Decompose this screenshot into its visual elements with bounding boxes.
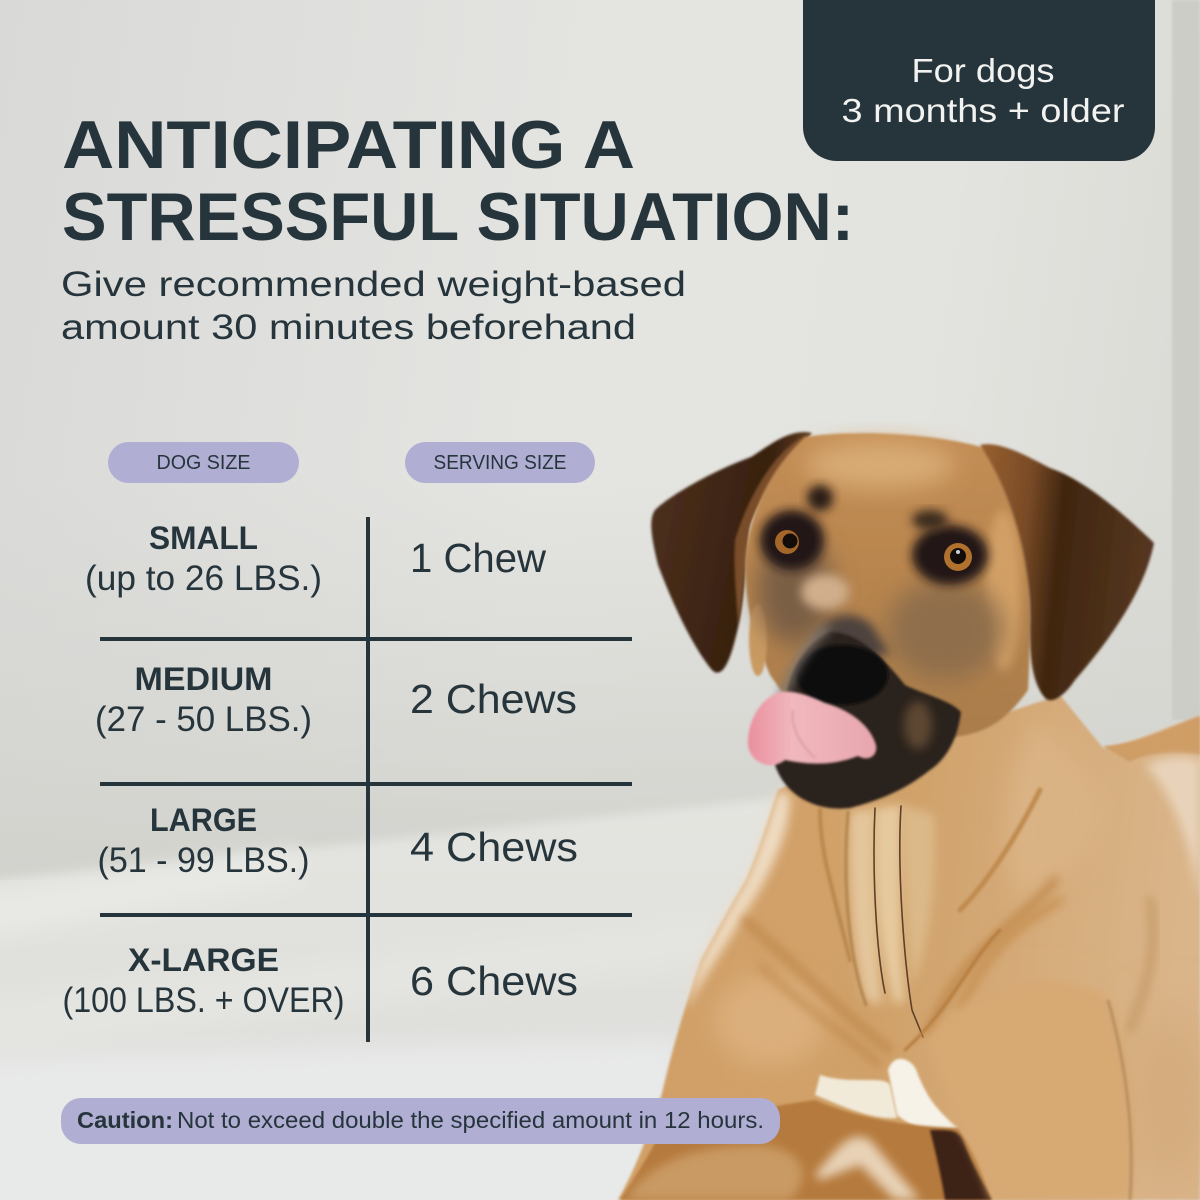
row: large: 4 Chews	[410, 824, 578, 870]
nose	[796, 645, 888, 705]
muzzle brown patch	[904, 701, 932, 749]
row: large	[98, 802, 578, 880]
dog eyes	[775, 530, 972, 571]
subtitle: Give recommended weight-based	[61, 264, 686, 304]
caution note	[61, 1098, 780, 1144]
title	[62, 107, 854, 255]
title: ANTICIPATING A	[62, 107, 635, 183]
caution note: Not to exceed double the specified amount in 12 hours.	[177, 1107, 764, 1133]
row: x-large: 6 Chews	[410, 958, 578, 1004]
dog left ear	[651, 432, 812, 673]
nose side highlight	[782, 628, 828, 700]
right cheek highlight	[985, 510, 1021, 670]
table grid lines	[100, 517, 632, 1042]
row: large: (51 - 99 LBS.)	[98, 841, 310, 880]
column header: serving size: SERVING SIZE	[434, 452, 566, 474]
eye mask shading	[757, 535, 833, 645]
row: medium: (27 - 50 LBS.)	[95, 700, 312, 739]
left cheek strip	[749, 604, 767, 676]
bridge highlight	[801, 574, 849, 610]
age badge	[803, 0, 1155, 161]
row: medium: MEDIUM	[134, 661, 272, 697]
title: STRESSFUL SITUATION:	[62, 179, 854, 255]
row: small: (up to 26 LBS.)	[85, 559, 322, 598]
row: medium: 2 Chews	[410, 676, 577, 722]
foreleg	[925, 981, 1134, 1200]
foreleg right edge highlight	[1108, 1000, 1131, 1200]
row: medium	[95, 661, 577, 739]
row: small	[85, 520, 546, 598]
age badge: For dogs	[912, 52, 1054, 89]
age badge: 3 months + older	[842, 92, 1125, 129]
column header: dog size	[108, 442, 299, 483]
row: x-large: X-LARGE	[128, 942, 279, 978]
caution note: Caution:	[77, 1107, 173, 1133]
column header: dog size: DOG SIZE	[156, 452, 250, 474]
dog tongue	[748, 692, 876, 765]
muzzle dark	[775, 632, 961, 809]
row: x-large: (100 LBS. + OVER)	[62, 981, 344, 1020]
white chest patches	[815, 1075, 897, 1118]
column header: serving size	[405, 442, 595, 483]
row: small: 1 Chew	[410, 535, 546, 581]
dog photo illustration	[618, 432, 1200, 1200]
tongue crease	[792, 710, 815, 758]
subtitle	[61, 264, 686, 347]
subtitle: amount 30 minutes beforehand	[61, 307, 636, 347]
row: x-large	[62, 942, 578, 1020]
bridge grey	[810, 615, 890, 660]
chest wrinkles	[745, 790, 1153, 1065]
back ridge	[1103, 716, 1200, 762]
dog body	[618, 695, 1200, 1200]
eye patches	[760, 510, 824, 570]
forehead highlight	[805, 441, 955, 489]
dog right ear	[980, 444, 1154, 700]
lower belly shadow	[620, 1100, 992, 1200]
row: large: LARGE	[150, 802, 257, 838]
row: small: SMALL	[149, 520, 258, 556]
dog head	[745, 433, 1030, 809]
